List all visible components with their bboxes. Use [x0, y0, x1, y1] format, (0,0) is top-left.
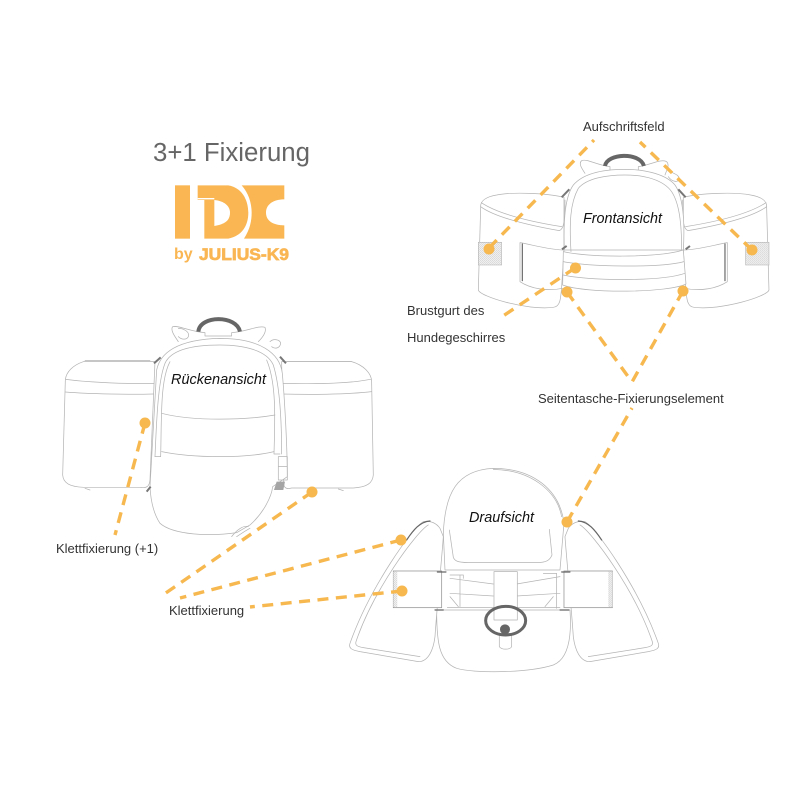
view labels: Frontansicht: [583, 210, 663, 227]
ring: [486, 606, 526, 635]
ball: [500, 624, 510, 634]
lower body: [437, 610, 570, 672]
buckles: [147, 357, 286, 492]
left pouch: [63, 361, 155, 490]
center strap: [494, 572, 517, 620]
harness straps: [447, 573, 560, 608]
callout labels: Hundegeschirres: [407, 330, 506, 345]
callout labels: Seitentasche-Fixierungselement: [538, 391, 724, 406]
illustration: top view bag: [350, 468, 659, 672]
view labels: Rückenansicht: [171, 371, 267, 388]
top straps and carabiner: [580, 160, 679, 181]
callout labels: [56, 119, 724, 618]
handle: [605, 156, 644, 166]
side buckle: [278, 457, 287, 480]
right side pouch: [682, 193, 769, 308]
callout labels: Aufschriftsfeld: [583, 119, 665, 134]
callout labels: Brustgurt des: [407, 303, 485, 318]
callout labels: Klettfixierung: [169, 603, 244, 618]
dashed leader lines: [115, 140, 752, 607]
tab: [499, 633, 512, 649]
callout labels: Klettfixierung (+1): [56, 541, 158, 556]
buckles: [562, 189, 690, 249]
view labels: [171, 210, 663, 526]
illustration: front view bag: [478, 156, 769, 308]
left pouch: [350, 521, 446, 662]
title: 3+1 Fixierung: [153, 139, 310, 167]
handle: [198, 319, 240, 332]
marker dots: [140, 244, 758, 596]
logo: IDC by JULIUS-K9: JULIUS-K9: [199, 245, 289, 264]
logo: IDC by JULIUS-K9: [174, 185, 289, 264]
logo: IDC by JULIUS-K9: by: [174, 246, 193, 263]
right pouch: [282, 362, 373, 491]
left side pouch: [478, 193, 565, 308]
illustration: back view bag: [63, 319, 373, 537]
view labels: Draufsicht: [469, 509, 535, 526]
right pouch: [560, 521, 659, 662]
back dome: [443, 468, 564, 570]
top straps and carabiner: [172, 326, 281, 348]
chest strap: [563, 250, 686, 291]
bottom tab: [232, 526, 250, 537]
main body: [564, 169, 684, 250]
main body: [150, 338, 287, 535]
